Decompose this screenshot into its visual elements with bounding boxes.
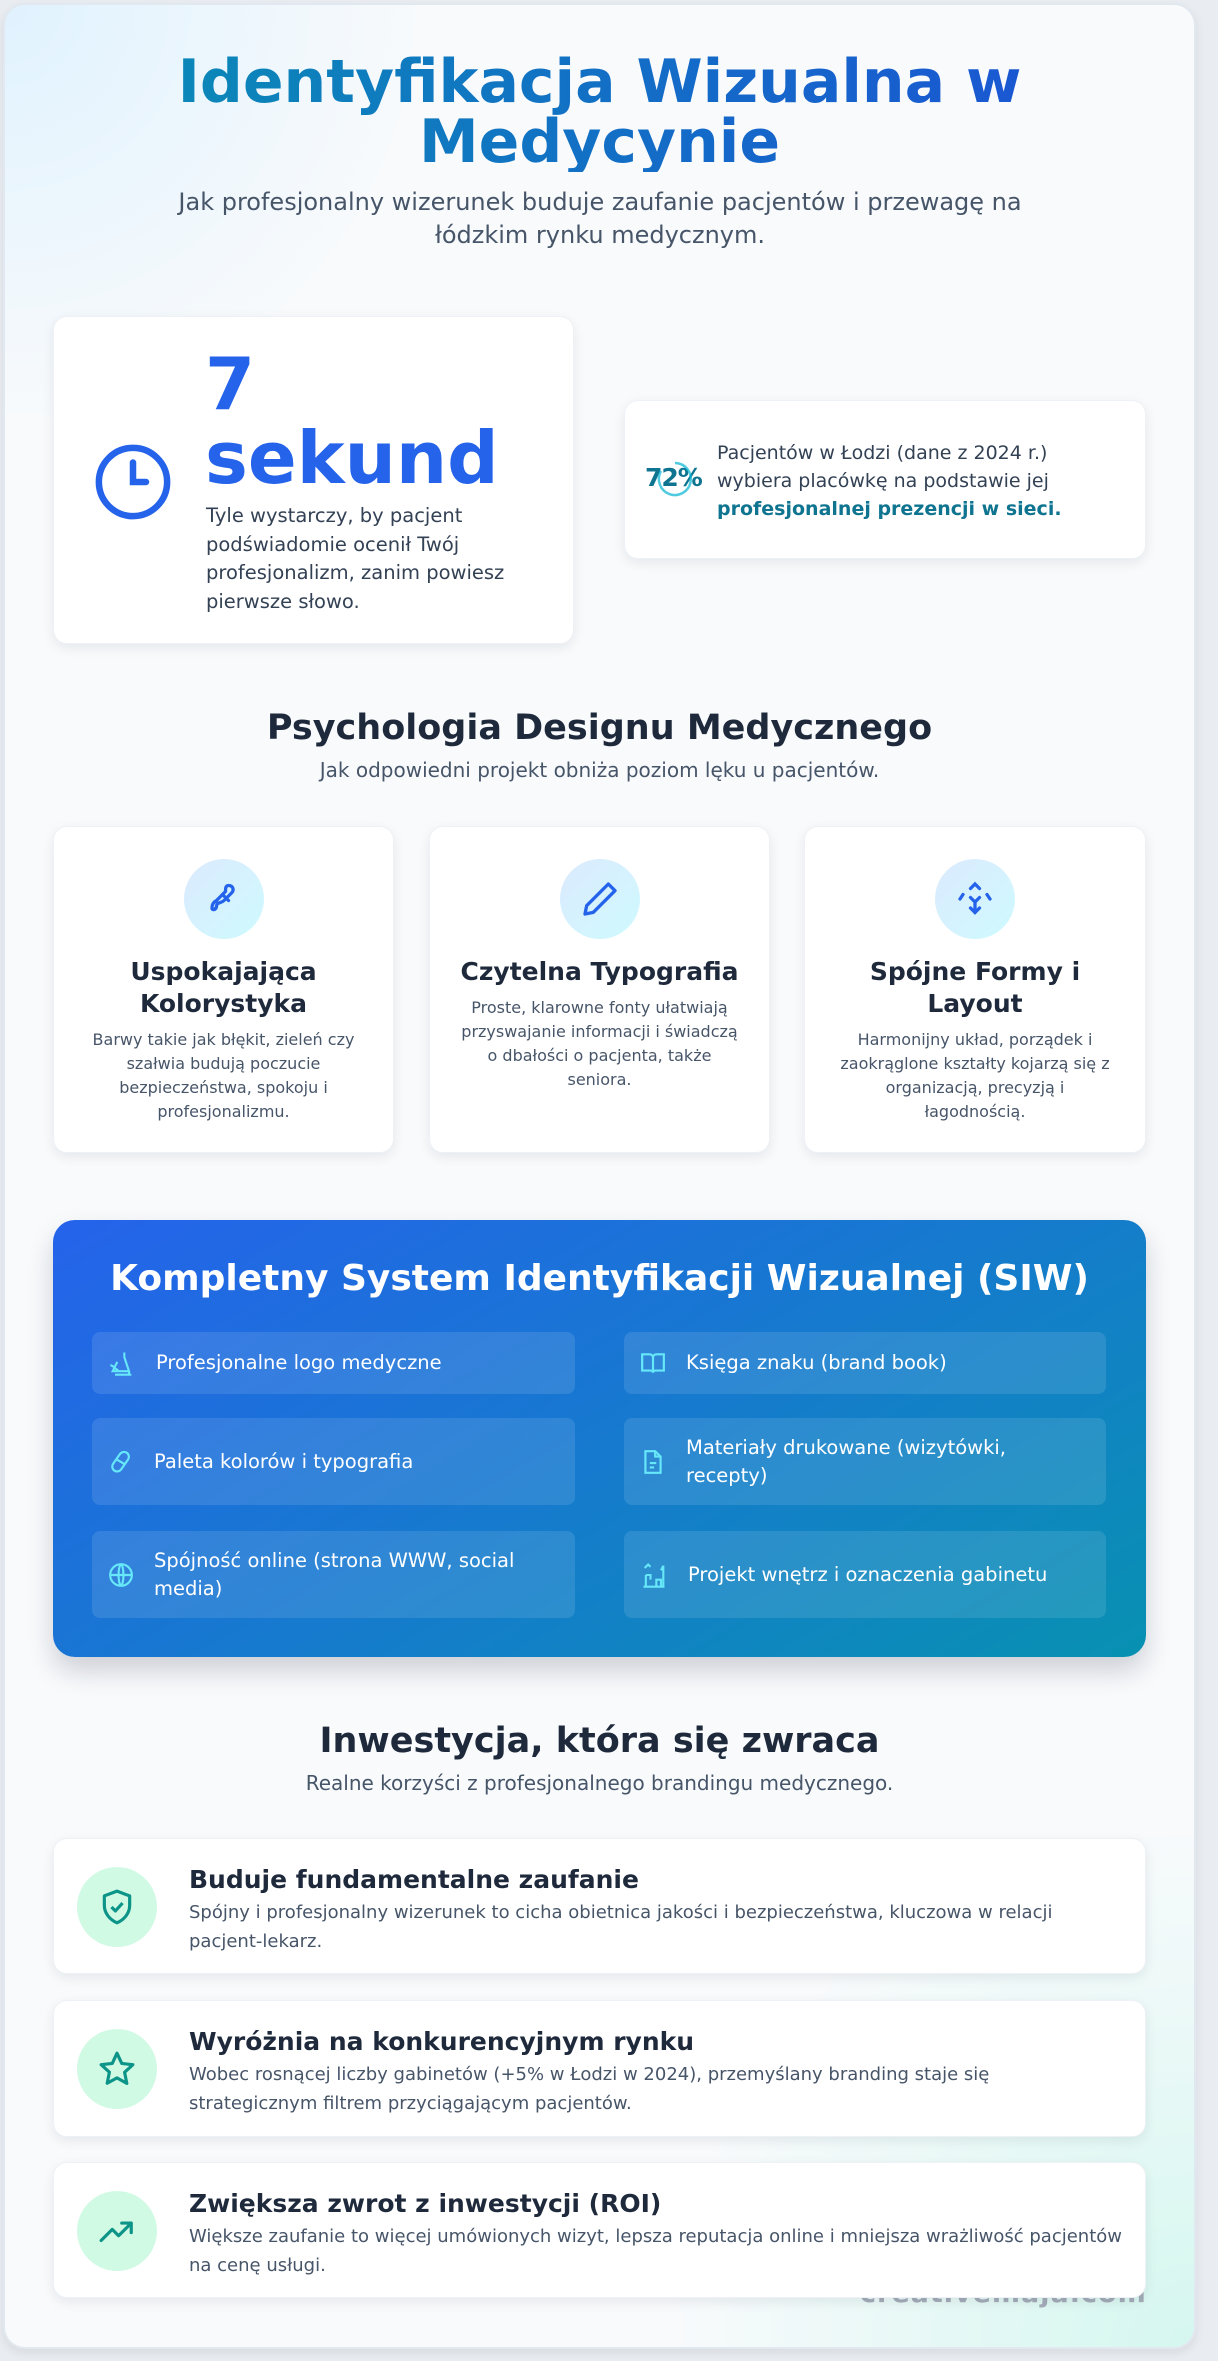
panel: layout	[804, 826, 1146, 1153]
panel: colors: Kolorystyka	[140, 989, 307, 1018]
benefit: ROI: Zwiększa zwrot z inwestycji (ROI)	[189, 2189, 661, 2218]
item: interior	[624, 1531, 1106, 1618]
item: online	[92, 1531, 575, 1618]
icon: shield	[77, 1867, 157, 1947]
benefit: competition	[53, 2000, 1146, 2137]
stat text: Tyle wystarczy, by pacjent podświadomie ocenił Twój profesjonalizm, zanim powiesz pierwsze słowo.	[206, 504, 504, 612]
icon: 72%: 72%	[645, 463, 702, 492]
heading: investment: Inwestycja, która się zwraca	[319, 1721, 880, 1761]
icon: trend	[77, 2191, 157, 2271]
benefit: ROI	[53, 2162, 1146, 2298]
stat number: sekund	[205, 416, 499, 500]
panel: typography: Czytelna Typografia	[460, 957, 738, 986]
subtitle: Jak profesjonalny wizerunek buduje zaufanie pacjentów i przewagę na łódzkim rynku medycznym.	[178, 188, 1022, 249]
panel: colors: Barwy takie jak błękit, zieleń czy szałwia budują poczucie bezpieczeństwa, spokoju i profesjonalizmu.	[93, 1030, 354, 1121]
benefit: trust	[53, 1838, 1146, 1974]
panel: layout: Harmonijny układ, porządek i zaokrąglone kształty kojarzą się z organizacją, precyzją i łagodnością.	[840, 1030, 1110, 1121]
item: brand book	[624, 1332, 1106, 1394]
icon: clock	[96, 444, 170, 520]
panel: typography: Proste, klarowne fonty ułatwiają przyswajanie informacji i świadczą o dbałości o pacjenta, także seniora.	[461, 998, 738, 1089]
benefit: competition: Wyróżnia na konkurencyjnym rynku	[189, 2027, 694, 2056]
panel: layout: Layout	[927, 989, 1023, 1018]
item: logo	[92, 1332, 575, 1394]
benefit: ROI: Większe zaufanie to więcej umówionych wizyt, lepsza reputacja online i mniejsza wrażliwość pacjentów	[189, 2226, 1122, 2247]
item: print	[624, 1418, 1106, 1505]
benefit: trust: Spójny i profesjonalny wizerunek to cicha obietnica jakości i bezpieczeństwa, kluczowa w relacji	[189, 1902, 1052, 1923]
item: online: Spójność online (strona WWW, social media)	[154, 1548, 514, 1600]
icon: arrows	[935, 859, 1015, 939]
icon: brush	[184, 859, 264, 939]
benefit: trust: Buduje fundamentalne zaufanie	[189, 1865, 639, 1894]
stat card: 7 sekund	[53, 316, 574, 644]
item: palette: Paleta kolorów i typografia	[154, 1450, 413, 1472]
title: Medycynie	[419, 107, 780, 177]
benefit: trust: pacjent-lekarz.	[189, 1931, 322, 1952]
heading: psychology: Psychologia Designu Medycznego	[267, 708, 932, 748]
panel: colors	[53, 826, 394, 1153]
panel: SIW	[53, 1220, 1146, 1657]
panel: typography	[429, 826, 770, 1153]
item: palette	[92, 1418, 575, 1505]
item: print: Materiały drukowane (wizytówki, recepty)	[686, 1436, 1006, 1486]
title: Identyfikacja Wizualna w	[178, 47, 1021, 117]
icon: star	[77, 2029, 157, 2109]
subheading: Jak odpowiedni projekt obniża poziom lęku u pacjentów.	[320, 758, 879, 782]
stat text: Pacjentów w Łodzi (dane z 2024 r.) wybiera placówkę na podstawie jej profesjonalnej prezencji w sieci.	[717, 442, 1062, 520]
benefit: competition: Wobec rosnącej liczby gabinetów (+5% w Łodzi w 2024), przemyślany branding staje się	[189, 2064, 989, 2085]
title	[178, 47, 1021, 177]
stat number: 7	[205, 342, 255, 426]
benefit: competition: strategicznym filtrem przyciągającym pacjentów.	[189, 2093, 632, 2114]
stat number	[205, 342, 499, 500]
stat card: 72%	[624, 400, 1146, 559]
item: interior: Projekt wnętrz i oznaczenia gabinetu	[688, 1562, 1047, 1586]
icon: pencil	[560, 859, 640, 939]
SIW title: Kompletny System Identyfikacji Wizualnej (SIW)	[110, 1258, 1089, 1299]
item: logo: Profesjonalne logo medyczne	[156, 1351, 442, 1374]
item: brand book: Księga znaku (brand book)	[686, 1351, 947, 1374]
watermark: creativemaja.com	[860, 2278, 1147, 2309]
panel: colors: Uspokajająca	[130, 957, 317, 986]
panel: layout: Spójne Formy i	[870, 957, 1080, 986]
benefit: ROI: na cenę usługi.	[189, 2255, 326, 2276]
subheading: Realne korzyści z profesjonalnego brandingu medycznego.	[306, 1771, 893, 1795]
